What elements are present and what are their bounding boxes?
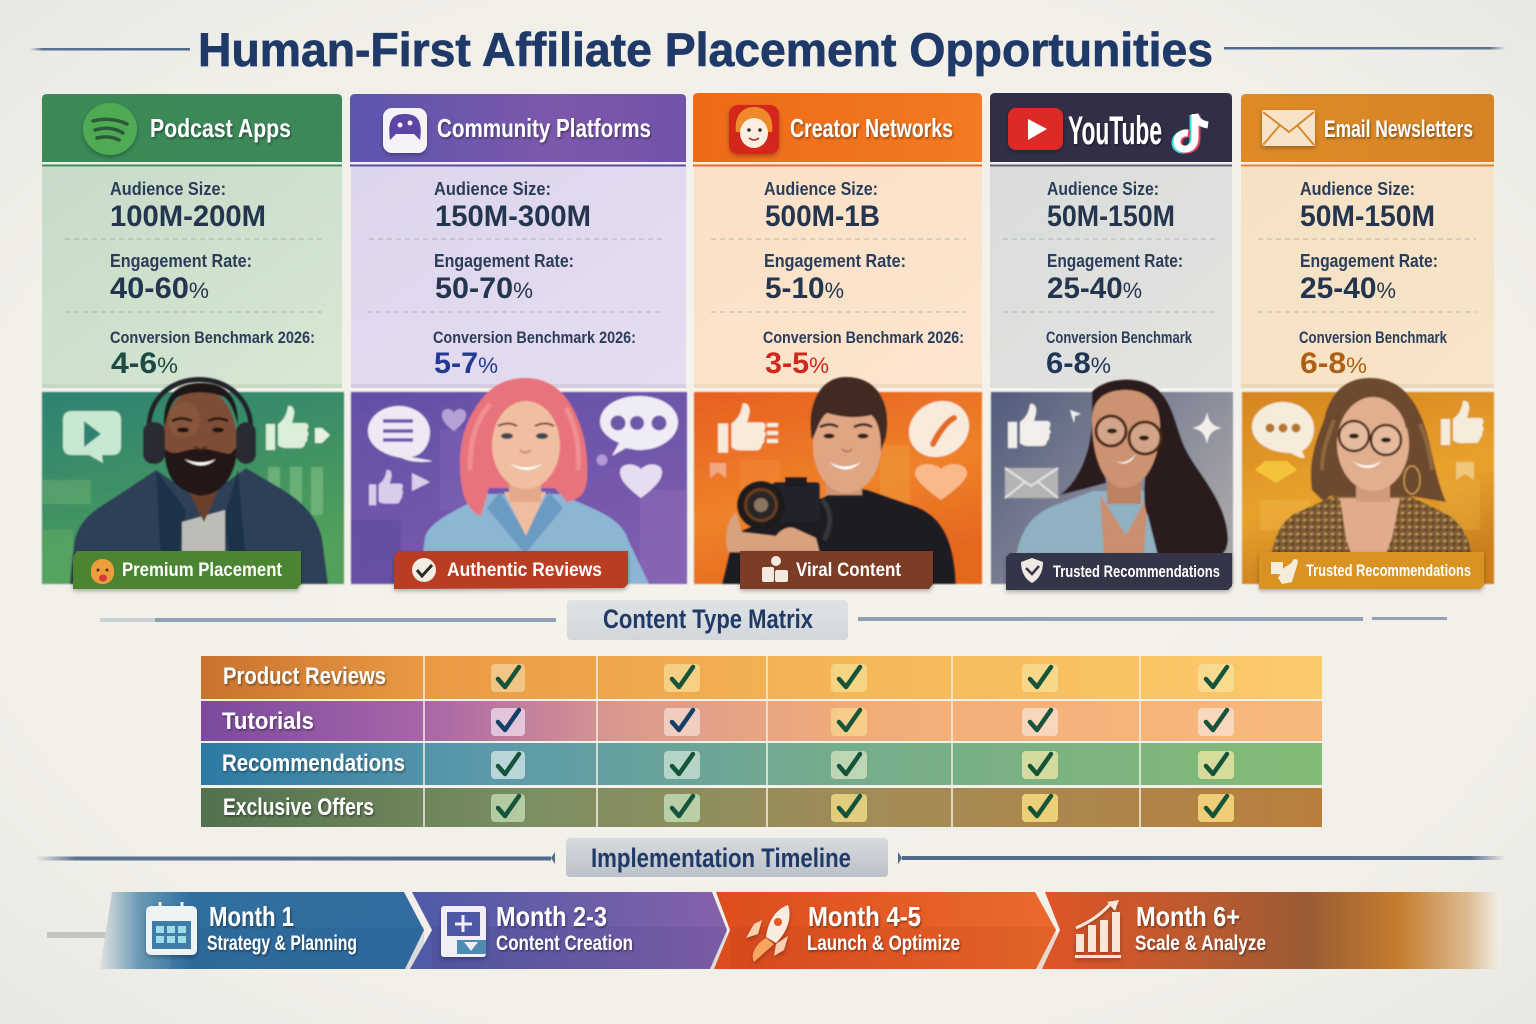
section heading: content type matrix [95, 600, 1447, 640]
badge: trusted recommendations [1006, 553, 1232, 590]
icon: rocket [746, 905, 790, 962]
icon: diamond [1255, 461, 1297, 483]
creator photo [694, 377, 982, 584]
row: exclusive offers [201, 788, 1322, 827]
heading: YouTube [1068, 109, 1162, 153]
icon: envelope [1005, 468, 1058, 498]
panel: youtube and tiktok [990, 93, 1233, 590]
community stats: Audience Size: [434, 178, 551, 199]
badge label: Premium Placement [122, 560, 283, 581]
icon: check shield [1021, 558, 1043, 583]
check marks [498, 667, 1227, 816]
step label: Month 4-5 [808, 901, 921, 932]
video header [990, 93, 1232, 166]
badge label: Viral Content [796, 560, 902, 581]
community photo [351, 378, 687, 584]
podcast stats [42, 167, 342, 388]
column dividers [424, 656, 1140, 827]
email stats: 6-8% [1300, 347, 1367, 380]
community stats: 50-70% [435, 272, 533, 305]
icon: sparkle [1192, 412, 1222, 444]
row: recommendations [201, 743, 1322, 785]
icon: check circle [412, 558, 436, 582]
podcast stats: Conversion Benchmark 2026: [110, 328, 315, 347]
video photo [991, 380, 1233, 584]
icon: big heart [620, 464, 662, 498]
heading: Email Newsletters [1324, 116, 1473, 143]
video stats: 50M-150M [1047, 200, 1175, 233]
row: exclusive offers: Exclusive Offers [223, 794, 374, 821]
icon: document [441, 906, 486, 957]
badge: premium placement [73, 551, 301, 589]
creator stats [694, 167, 982, 388]
step: month 6+ [1042, 892, 1500, 969]
step: month 2-3 [410, 892, 727, 969]
step label: Month 1 [209, 901, 294, 932]
email stats: Audience Size: [1300, 178, 1415, 199]
implementation timeline [47, 892, 1500, 969]
email stats: 25-40% [1300, 272, 1396, 305]
video stats: Audience Size: [1047, 178, 1159, 199]
icon: small play [315, 428, 330, 443]
creator header [693, 93, 982, 166]
icon: cursor [1070, 410, 1081, 423]
email photo [1242, 378, 1494, 584]
step label: Month 6+ [1136, 901, 1240, 932]
video stats: Conversion Benchmark [1046, 328, 1192, 347]
creator stats: Engagement Rate: [764, 250, 906, 271]
person: podcaster [70, 380, 328, 584]
badge label: Trusted Recommendations [1053, 562, 1220, 581]
icon: spotify [83, 103, 137, 155]
icon: thumbs tag [1271, 559, 1298, 584]
icon: thumbs up [718, 403, 778, 453]
email stats: Conversion Benchmark [1299, 328, 1447, 347]
step label: Launch & Optimize [807, 932, 960, 955]
icon: small play [412, 473, 430, 491]
creator stats: Audience Size: [764, 178, 878, 199]
badge: authentic reviews [394, 551, 628, 589]
heading: Community Platforms [437, 113, 651, 143]
icon: bookmark [710, 463, 726, 478]
icon: thumbs up [1008, 404, 1050, 448]
podcast stats: Audience Size: [110, 178, 226, 199]
row: product reviews [201, 656, 1322, 699]
icon: thumbs up [1441, 401, 1484, 445]
podcast stats: 4-6% [111, 347, 178, 380]
icon: people blocks [762, 556, 788, 582]
step label: Scale & Analyze [1135, 932, 1266, 955]
content type matrix table [201, 656, 1322, 827]
icon: dots bubble [596, 396, 678, 466]
step label: Strategy & Planning [207, 932, 357, 955]
icon: community app [383, 108, 427, 153]
section heading: implementation timeline [35, 838, 1506, 877]
icon: chat lines [368, 406, 433, 462]
icon: bookmark [1456, 462, 1474, 480]
panel: creator networks [693, 93, 982, 589]
step: month 1 [100, 892, 424, 969]
email stats [1241, 167, 1494, 388]
community header [350, 94, 686, 166]
step label [1135, 901, 1266, 955]
email stats: Engagement Rate: [1300, 250, 1438, 271]
video stats: Engagement Rate: [1047, 250, 1183, 271]
title: Human-First Affiliate Placement Opportunities [198, 23, 1213, 76]
person: community host [419, 378, 649, 584]
community stats: Conversion Benchmark 2026: [433, 328, 636, 347]
video stats [990, 167, 1232, 388]
panel: podcast apps [42, 94, 344, 589]
person: woman in glasses with brown hair [1270, 378, 1474, 584]
icon: dots bubble [1252, 402, 1314, 458]
icon: calendar [146, 902, 197, 955]
icon: growth chart [1075, 900, 1121, 958]
icon: play bubble [63, 411, 121, 463]
icon: emoji [91, 559, 114, 584]
badge label: Authentic Reviews [447, 560, 602, 581]
email header [1241, 94, 1494, 166]
email stats: 50M-150M [1300, 200, 1435, 233]
icon: link blob [899, 390, 979, 468]
icon: small thumbs up [369, 470, 403, 505]
creator stats: 500M-1B [765, 200, 880, 233]
icon: heart [442, 409, 466, 431]
creator stats: Conversion Benchmark 2026: [763, 328, 964, 347]
podcast stats: 40-60% [110, 272, 209, 305]
icon: heart [915, 464, 967, 500]
row: recommendations: Recommendations [222, 750, 405, 777]
video stats: 6-8% [1046, 347, 1111, 380]
section heading: content type matrix: Content Type Matrix [603, 604, 813, 634]
icon: youtube play [1008, 108, 1063, 150]
panel: community platforms [350, 94, 687, 589]
podcast header [42, 94, 342, 166]
person: creator with camera [722, 377, 956, 584]
creator stats: 5-10% [765, 272, 844, 305]
row: tutorials: Tutorials [222, 708, 314, 735]
community stats: 150M-300M [435, 200, 591, 233]
icon: envelope [1262, 110, 1315, 146]
community stats: 5-7% [434, 347, 498, 380]
person: woman in glasses with dark hair [1013, 380, 1229, 584]
badge: viral content [740, 551, 933, 589]
section heading: implementation timeline: Implementation Timeline [591, 843, 851, 873]
row: product reviews: Product Reviews [223, 663, 386, 690]
step label [207, 901, 357, 955]
community stats [351, 167, 686, 388]
badge: trusted recommendations gold [1259, 552, 1484, 589]
icon: creator face [729, 105, 779, 154]
podcast stats: Engagement Rate: [110, 250, 252, 271]
heading: Podcast Apps [150, 113, 291, 143]
step: month 4-5 [714, 892, 1056, 969]
heading: Creator Networks [790, 113, 953, 143]
row: tutorials [201, 701, 1322, 741]
video stats: 25-40% [1047, 272, 1142, 305]
creator stats: 3-5% [765, 347, 829, 380]
badge label: Trusted Recommendations [1306, 561, 1471, 580]
community stats: Engagement Rate: [434, 250, 574, 271]
step label: Content Creation [496, 932, 633, 955]
podcast stats: 100M-200M [110, 200, 266, 233]
icon: thumbs up [266, 406, 308, 450]
step label [496, 901, 633, 955]
step label [807, 901, 960, 955]
step label: Month 2-3 [496, 901, 607, 932]
panel: email newsletters [1241, 94, 1494, 589]
podcast photo [42, 380, 344, 584]
icon: tiktok [1175, 114, 1208, 150]
